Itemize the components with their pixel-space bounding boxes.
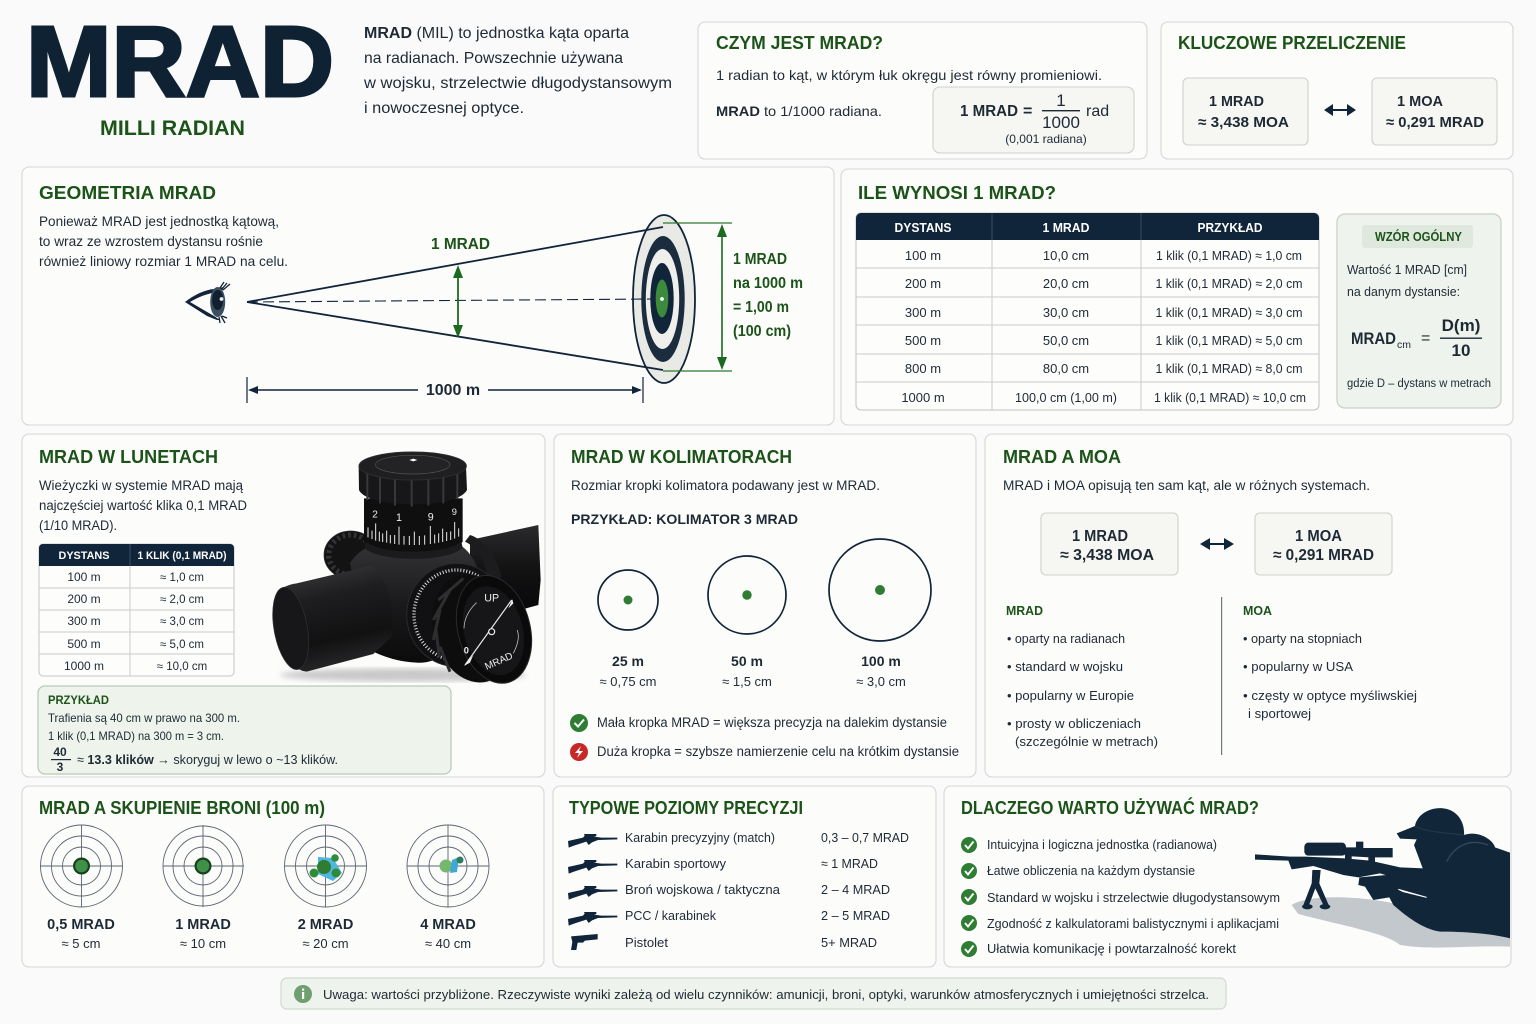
icon: info	[294, 985, 312, 1003]
subtitle: MILLI RADIAN	[100, 117, 245, 140]
box: 1 moa: ≈ 0,291 MRAD	[1273, 547, 1374, 564]
table: clicks: 1 KLIK (0,1 MRAD)	[138, 550, 227, 562]
target: 0,5 mrad: ≈ 5 cm	[62, 936, 100, 951]
table: 10,0 cm	[1043, 248, 1089, 263]
description: (1/10 MRAD).	[39, 518, 117, 533]
formula box: 1 MRAD	[960, 103, 1018, 120]
row: pistol	[571, 934, 877, 950]
description: najczęściej wartość klika 0,1 MRAD	[39, 498, 247, 513]
target: 4 mrad: 4 MRAD	[420, 917, 476, 933]
title: MRAD	[26, 6, 334, 118]
benefit 1: Intuicyjna i logiczna jednostka (radianowa)	[987, 837, 1217, 852]
table: 800 m	[905, 361, 941, 376]
example box: 1 klik (0,1 MRAD) na 300 m = 3 cm.	[48, 729, 224, 743]
table: 500 m	[905, 333, 941, 348]
table: clicks: ≈ 10,0 cm	[157, 661, 207, 673]
box: 1 moa	[1255, 513, 1392, 575]
target: 0,5 mrad: 0,5 MRAD	[47, 917, 115, 933]
heading: GEOMETRIA MRAD	[39, 182, 216, 203]
formula card: =	[1421, 330, 1430, 347]
subheading: PRZYKŁAD: KOLIMATOR 3 MRAD	[571, 511, 798, 527]
formula box: 1	[1056, 91, 1066, 110]
panel: czym jest mrad	[698, 22, 1147, 159]
panel: dlaczego warto uzywac mrad	[944, 786, 1511, 967]
scope illustration: 0	[464, 645, 469, 655]
panel: typowe poziomy precyzji	[553, 786, 936, 967]
description: Rozmiar kropki kolimatora podawany jest w MRAD.	[571, 478, 880, 493]
formula card: gdzie D – dystans w metrach	[1347, 378, 1491, 390]
row: pistol: 5+ MRAD	[821, 935, 877, 950]
row: match rifle: 0,3 – 0,7 MRAD	[821, 830, 909, 845]
benefit 2: Łatwe obliczenia na każdym dystansie	[987, 863, 1195, 878]
table: clicks: ≈ 1,0 cm	[160, 572, 204, 584]
list: mrad: • oparty na radianach	[1007, 631, 1125, 646]
callout: large dot: Duża kropka = szybsze namierzenie celu na krótkim dystansie	[597, 744, 959, 759]
table: clicks: 300 m	[67, 614, 101, 628]
table: 80,0 cm	[1043, 361, 1089, 376]
heading: MRAD A SKUPIENIE BRONI (100 m)	[39, 797, 325, 818]
arrow: 1 mrad angle	[453, 265, 463, 338]
panel: mrad w kolimatorach	[554, 434, 976, 777]
box: 1 moa	[1372, 78, 1497, 145]
row: pcc carbine: 2 – 5 MRAD	[821, 908, 890, 923]
reticle: 100 m	[829, 539, 931, 689]
formula box: rad	[1086, 103, 1109, 120]
table: 1 klik (0,1 MRAD) ≈ 2,0 cm	[1156, 276, 1302, 291]
example box: 40	[53, 745, 67, 759]
intro text: MRAD (MIL) to jednostka kąta oparta	[364, 25, 629, 42]
example box: Trafienia są 40 cm w prawo na 300 m.	[48, 711, 240, 725]
scope illustration: 9	[428, 511, 434, 523]
benefit 4: Zgodność z kalkulatorami balistycznymi i aplikacjami	[987, 916, 1279, 931]
formula box: =	[1023, 103, 1032, 120]
table	[856, 213, 1319, 410]
arrow: conversion	[1324, 104, 1356, 116]
panel: mrad a moa	[985, 434, 1511, 777]
heading: ILE WYNOSI 1 MRAD?	[858, 182, 1056, 203]
target: 0,5 mrad	[40, 825, 123, 951]
table: 20,0 cm	[1043, 276, 1089, 291]
row: match rifle	[568, 830, 909, 848]
target: 1 mrad	[163, 825, 244, 951]
scope illustration: MRAD	[483, 651, 515, 673]
panel: geometria mrad	[22, 167, 834, 425]
description: również liniowy rozmiar 1 MRAD na celu.	[39, 253, 288, 269]
heading: MRAD W LUNETACH	[39, 446, 218, 467]
description: to wraz ze wzrostem dystansu rośnie	[39, 233, 263, 249]
benefit 3: Standard w wojsku i strzelectwie długodystansowym	[987, 890, 1280, 905]
formula card: Wartość 1 MRAD [cm]	[1347, 263, 1467, 277]
reticle: 25 m	[598, 570, 658, 689]
table: 1 klik (0,1 MRAD) ≈ 8,0 cm	[1156, 361, 1302, 376]
list: moa: • częsty w optyce myśliwskiej	[1243, 688, 1417, 703]
scope illustration: 1	[396, 512, 402, 524]
table: PRZYKŁAD	[1198, 221, 1262, 235]
heading: DLACZEGO WARTO UŻYWAĆ MRAD?	[961, 797, 1259, 818]
box: 1 mrad	[1183, 78, 1308, 145]
box: 1 mrad	[1041, 513, 1178, 575]
table: 30,0 cm	[1043, 305, 1089, 320]
example box: PRZYKŁAD	[48, 693, 109, 707]
formula box	[933, 87, 1134, 153]
target: 4 mrad: ≈ 40 cm	[425, 936, 471, 951]
panel: kluczowe przeliczenie	[1161, 22, 1513, 159]
list: mrad: MRAD	[1006, 604, 1043, 618]
table: DYSTANS	[894, 221, 952, 235]
box: 1 mrad: ≈ 3,438 MOA	[1060, 547, 1154, 564]
target: 1 mrad: 1 MRAD	[175, 917, 231, 933]
table: 1 klik (0,1 MRAD) ≈ 10,0 cm	[1154, 390, 1306, 405]
example box	[38, 686, 451, 774]
box: 1 moa: 1 MOA	[1397, 93, 1443, 110]
table: clicks: 100 m	[67, 570, 101, 584]
reticle: 100 m: ≈ 3,0 cm	[856, 674, 906, 689]
arrow: moa conversion	[1200, 538, 1234, 550]
list: mrad: • popularny w Europie	[1007, 688, 1134, 703]
label: target size: 1 MRAD	[733, 251, 787, 268]
panel: ile wynosi 1 mrad	[841, 169, 1513, 425]
icon: eye	[185, 282, 230, 323]
label: target size: (100 cm)	[733, 323, 791, 340]
heading: MRAD W KOLIMATORACH	[571, 446, 792, 467]
reticle: 50 m: ≈ 1,5 cm	[722, 674, 772, 689]
target	[633, 215, 695, 383]
table: 100,0 cm (1,00 m)	[1015, 390, 1117, 405]
row: sport rifle: Karabin sportowy	[625, 856, 726, 871]
formula card: MRAD	[1351, 329, 1396, 348]
arrow: distance 1000 m	[247, 377, 643, 403]
scope illustration: 9	[452, 507, 457, 517]
target: 2 mrad: ≈ 20 cm	[302, 936, 349, 951]
list: benefits	[961, 837, 1280, 957]
list: moa: • oparty na stopniach	[1243, 631, 1362, 646]
table: 1 MRAD	[1042, 221, 1090, 235]
list: mrad: • standard w wojsku	[1007, 659, 1123, 674]
table: 1000 m	[901, 390, 945, 405]
scope illustration: 2	[372, 509, 378, 520]
panel: mrad w lunetach	[22, 434, 545, 777]
arrow: distance 1000 m: 1000 m	[426, 382, 480, 399]
table: clicks: ≈ 2,0 cm	[160, 594, 204, 606]
table: clicks: ≈ 3,0 cm	[160, 616, 204, 628]
list: moa	[1243, 604, 1417, 721]
table: 50,0 cm	[1043, 333, 1089, 348]
description: Wieżyczki w systemie MRAD mają	[39, 478, 243, 493]
target: 2 mrad	[284, 825, 367, 951]
list: moa: i sportowej	[1248, 706, 1311, 721]
table: clicks: 1000 m	[64, 659, 104, 673]
callout: small dot: Mała kropka MRAD = większa precyzja na dalekim dystansie	[597, 715, 947, 730]
row: match rifle: Karabin precyzyjny (match)	[625, 830, 775, 845]
panel: mrad a skupienie broni	[22, 786, 544, 967]
note bar: Uwaga: wartości przybliżone. Rzeczywiste wyniki zależą od wielu czynników: amunicji, broni, optyki, warunków atmosferycznych i umiejętności strzelca.	[323, 987, 1209, 1002]
sight cone lines	[247, 227, 663, 370]
heading: MRAD A MOA	[1003, 446, 1121, 467]
reticle: 50 m	[708, 556, 786, 689]
intro text: na radianach. Powszechnie używana	[364, 50, 623, 67]
reticle: 100 m: 100 m	[861, 653, 901, 669]
definition text: 1 radian to kąt, w którym łuk okręgu jest równy promieniowi.	[716, 67, 1102, 83]
table: 100 m	[905, 248, 941, 263]
box: 1 mrad: ≈ 3,438 MOA	[1198, 114, 1289, 131]
label: target size: na 1000 m	[733, 275, 803, 292]
table: 1 klik (0,1 MRAD) ≈ 1,0 cm	[1156, 248, 1302, 263]
reticle: 25 m: ≈ 0,75 cm	[600, 674, 656, 689]
note bar	[281, 978, 1226, 1009]
illustration: prone shooter	[1255, 808, 1510, 948]
table: clicks: 500 m	[67, 637, 101, 651]
list: mrad: • prosty w obliczeniach	[1007, 716, 1141, 731]
table: 300 m	[905, 305, 941, 320]
formula box: (0,001 radiana)	[1005, 132, 1087, 146]
table: clicks: 200 m	[67, 592, 101, 606]
scope illustration: UP	[484, 593, 499, 605]
box: 1 moa: 1 MOA	[1295, 528, 1342, 545]
table: 200 m	[905, 276, 941, 291]
list: moa: MOA	[1243, 604, 1272, 618]
mrad definition: MRAD to 1/1000 radiana.	[716, 103, 882, 119]
heading: TYPOWE POZIOMY PRECYZJI	[569, 797, 803, 818]
arrow: target height	[663, 223, 732, 371]
benefit 5: Ułatwia komunikację i powtarzalność korekt	[987, 941, 1236, 956]
label: 1 mrad: 1 MRAD	[431, 236, 490, 253]
row: pcc carbine: PCC / karabinek	[625, 908, 716, 923]
table: clicks: ≈ 5,0 cm	[160, 639, 204, 651]
row: military rifle: Broń wojskowa / taktyczna	[625, 882, 781, 897]
row: pcc carbine	[568, 908, 890, 926]
row: military rifle	[568, 882, 890, 900]
formula card: na danym dystansie:	[1347, 285, 1460, 299]
table: clicks	[39, 544, 234, 676]
intro text: i nowoczesnej optyce.	[364, 100, 524, 117]
target: 1 mrad: ≈ 10 cm	[180, 936, 226, 951]
row: sport rifle	[568, 856, 878, 874]
description: MRAD i MOA opisują ten sam kąt, ale w różnych systemach.	[1003, 478, 1370, 493]
target: 2 mrad: 2 MRAD	[298, 917, 353, 933]
reticle: 25 m: 25 m	[612, 653, 644, 669]
row: sport rifle: ≈ 1 MRAD	[821, 856, 878, 871]
heading: CZYM JEST MRAD?	[716, 32, 883, 53]
formula card: D(m)	[1442, 316, 1480, 335]
target: 4 mrad	[407, 825, 489, 951]
table: clicks: DYSTANS	[58, 550, 110, 562]
formula card: cm	[1397, 339, 1411, 351]
formula card: WZÓR OGÓLNY	[1375, 229, 1463, 244]
table: 1 klik (0,1 MRAD) ≈ 5,0 cm	[1156, 333, 1302, 348]
list: mrad: (szczególnie w metrach)	[1015, 734, 1158, 749]
row: military rifle: 2 – 4 MRAD	[821, 882, 890, 897]
label: target size: = 1,00 m	[733, 299, 789, 316]
intro text: w wojsku, strzelectwie długodystansowym	[363, 75, 672, 92]
description	[39, 213, 288, 269]
reticle: 50 m: 50 m	[731, 653, 763, 669]
description	[39, 478, 247, 533]
intro text	[363, 25, 672, 117]
formula box: 1000	[1042, 113, 1080, 132]
label: target size	[733, 251, 803, 340]
box: 1 mrad: 1 MRAD	[1072, 528, 1128, 545]
table: 1 klik (0,1 MRAD) ≈ 3,0 cm	[1156, 305, 1302, 320]
list: moa: • popularny w USA	[1243, 659, 1353, 674]
example box: ≈ 13.3 klików → skoryguj w lewo o ~13 klików.	[77, 752, 338, 767]
description: Ponieważ MRAD jest jednostką kątową,	[39, 213, 279, 229]
box: 1 moa: ≈ 0,291 MRAD	[1386, 114, 1484, 131]
formula card: 10	[1452, 341, 1470, 360]
example box: 3	[57, 760, 64, 774]
heading: KLUCZOWE PRZELICZENIE	[1178, 32, 1406, 53]
list: mrad	[1006, 604, 1158, 749]
formula card	[1337, 214, 1501, 408]
scope illustration	[267, 452, 543, 692]
box: 1 mrad: 1 MRAD	[1209, 93, 1264, 110]
row: pistol: Pistolet	[625, 935, 668, 950]
